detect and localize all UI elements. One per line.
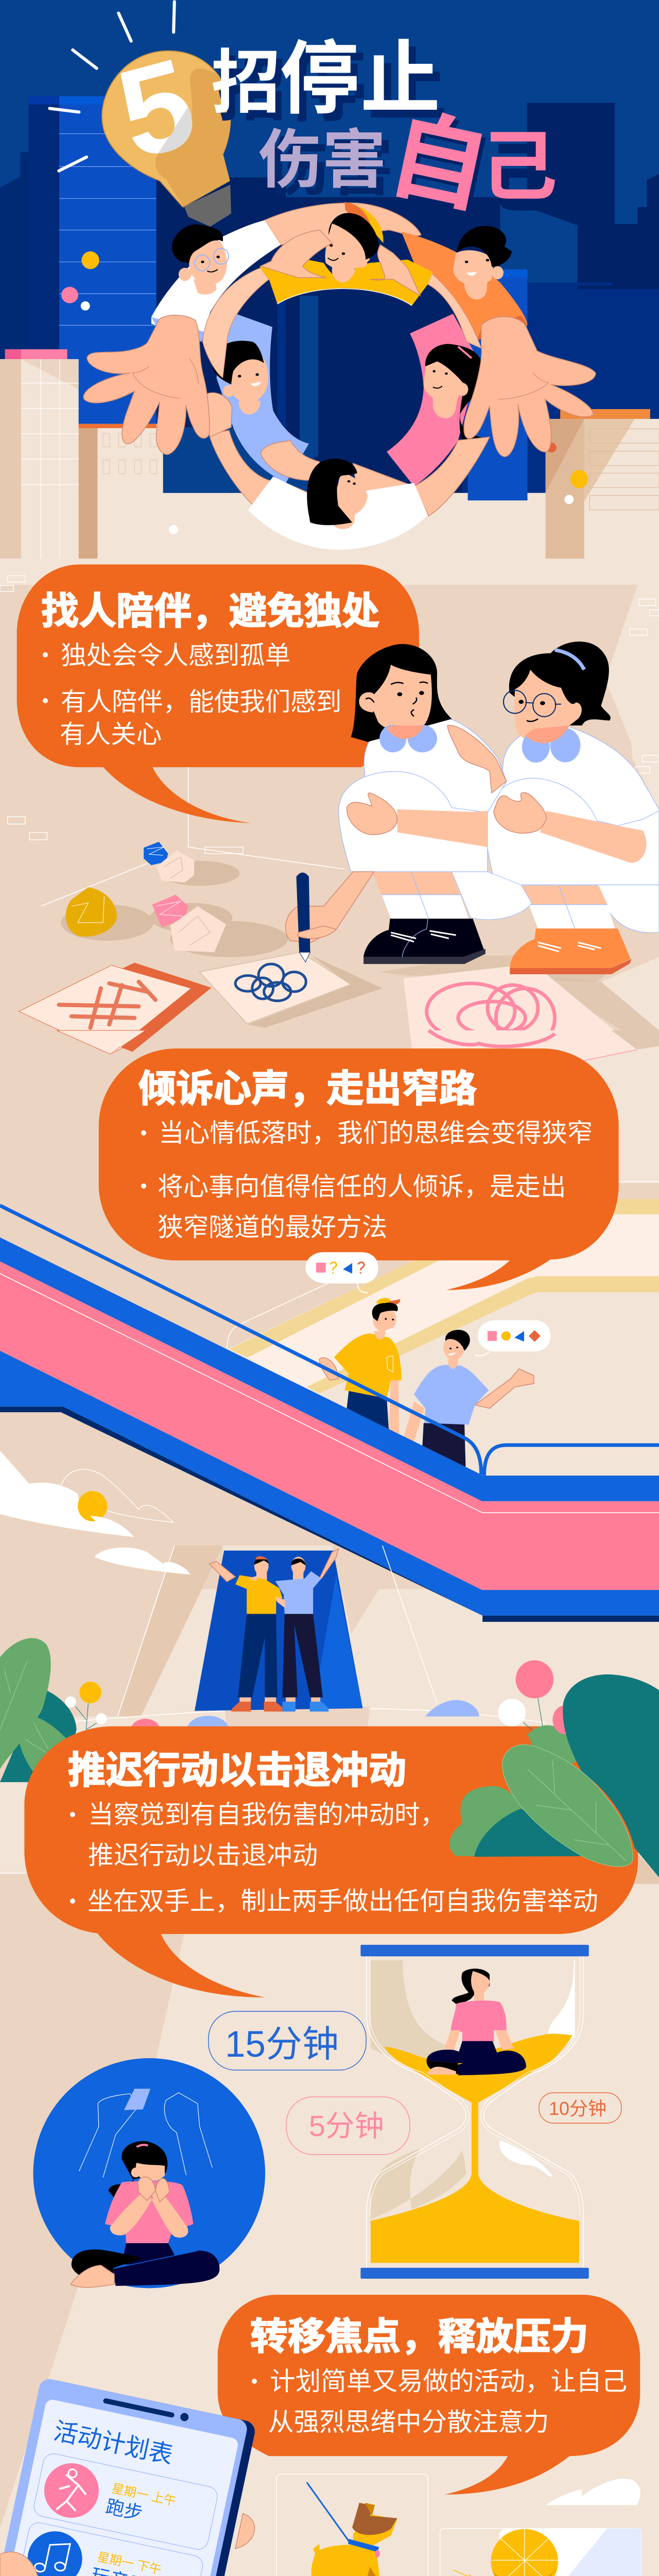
floor shadows [61,861,630,982]
title: 5招停止伤害自己: 停 [280,35,359,124]
background: room floor section 1 [0,575,659,1030]
schedule title: 活动计划表 [51,2417,176,2469]
illustration: dog, basketball frames [276,2474,641,2576]
illustration: distressed woman in blue circle [33,2058,265,2288]
illustration: two girls sitting and scribbling [19,641,659,1054]
bubble: 推迟行动以击退冲动: 推迟行动以击退冲动 [68,1750,406,1791]
title bulb with number 5: 5 [105,31,209,185]
scribbled papers [19,952,637,1054]
title bulb with number 5 [49,2,231,227]
person: pink shirt [387,314,490,486]
arms forming lower ring [202,268,490,516]
time label: 15分钟: 15分钟 [225,2024,339,2065]
hands with blade outline [79,2089,212,2177]
dome decoration [425,1700,479,1717]
card: running [32,2452,219,2551]
meditating woman in hourglass [427,1969,526,2075]
title: 5招停止伤害自己: 招 [211,44,281,122]
crumpled paper balls [66,842,226,952]
background: stage tent and ground [0,1543,659,2528]
title: 5招停止伤害自己: 止 [360,35,440,124]
title: 5招停止伤害自己: 伤害 [258,125,386,196]
title: 5招停止伤害自己: 招 [217,52,287,129]
bubble: 推迟行动以击退冲动: 推迟行动以击退冲动 [88,1841,318,1870]
phone: activity schedule [0,2377,257,2576]
man in yellow [210,1556,284,1711]
title: 5招停止伤害自己: 己 [488,135,565,222]
time label: 5分钟 [286,2097,410,2155]
card: music [18,2521,204,2576]
title: 5招停止伤害自己: 己 [480,123,558,210]
bubble: 推迟行动以击退冲动: 坐在双手上，制止两手做出任何自我伤害举动 [88,1887,598,1916]
plants right with balloons [449,1660,659,1877]
title: 5招停止伤害自己 [211,35,565,230]
card: running: 星期一 上午 [111,2482,177,2509]
bubble: 倾诉心声，走出窄路: 狭窄隧道的最好方法 [158,1213,387,1242]
ring interior [269,292,423,467]
bubble: 倾诉心声，走出窄路: 将心事向值得信任的人倾诉，是走出 [158,1172,566,1201]
background: escalator hall wall [0,1030,659,1589]
bubble: 转移焦点，释放压力: 从强烈思绪中分散注意力 [268,2408,549,2436]
escalator [0,1206,659,1622]
title: 5招停止伤害自己: 自 [384,103,501,230]
buildings: foreground left and right [0,349,659,558]
speech bubble with symbols [305,1252,378,1293]
thumb [0,2552,38,2576]
person: light-blue shirt [212,312,309,483]
bubble: 转移焦点，释放压力: 转移焦点，释放压力 [250,2316,588,2358]
woman crying [71,2141,219,2287]
time label: 5分钟: 5分钟 [309,2110,384,2143]
bubble: 找人陪伴，避免独处: 独处会令人感到孤单 [61,641,290,670]
bubble: 倾诉心声，走出窄路: 倾诉心声，走出窄路 [138,1068,477,1110]
title: 5招停止伤害自己: 停 [287,42,367,131]
girl one [286,644,532,964]
man in blue [248,1549,338,1711]
hand fingers holding the phone [0,2514,265,2576]
title: 5招停止伤害自己: 伤害 [266,132,393,204]
basketball and hoop [440,2529,641,2576]
bubble: 倾诉心声，走出窄路: 当心情低落时，我们的思维会变得狭窄 [159,1118,593,1147]
right fingers [169,2514,265,2576]
bubble: 转移焦点，释放压力: 计划简单又易做的活动，让自己 [270,2367,627,2396]
large right hand [464,317,596,456]
large left hand [83,315,210,454]
dog on a leash [276,2474,428,2576]
title: 5招停止伤害自己: 自 [380,99,498,226]
cloud and sun [0,1451,173,1537]
bubble: 找人陪伴，避免独处 [17,565,419,823]
plants left with balloons [0,1638,229,1782]
title: 5招停止伤害自己: 止 [368,42,447,131]
man in blue shirt [404,1330,534,1467]
card: running: 跑步 [104,2496,145,2524]
illustration: five friends linking arms in a ring [83,202,596,550]
time label: 15分钟 [209,2011,366,2070]
title bulb with number 5: 5 [105,31,209,185]
background: night city skyline [0,0,659,500]
cloud right [546,2479,640,2505]
glass and sand [360,1945,589,2279]
time label: 10分钟 [539,2093,621,2123]
bubble: 倾诉心声，走出窄路 [99,1048,619,1290]
bubble: 转移焦点，释放压力 [218,2295,640,2495]
person: white shirt [151,203,421,342]
girl two [485,641,659,974]
man in yellow shirt [319,1298,402,1434]
bubble: 找人陪伴，避免独处: 有人关心 [60,720,162,749]
time label: 10分钟: 10分钟 [549,2098,606,2119]
illustration: two men standing in a blue doorway [0,1548,479,1782]
bubble: 推迟行动以击退冲动: 当察觉到有自我伤害的冲动时， [88,1800,445,1829]
person: lady at bottom centre [248,459,428,550]
bubble: 找人陪伴，避免独处: 找人陪伴，避免独处 [41,590,379,632]
hourglass [360,1945,589,2279]
blue doorway [95,1548,362,1711]
illustration: two men on escalator [0,1206,659,1622]
person: yellow shirt and cap at top [259,202,433,306]
speech bubble with shapes [475,1320,550,1355]
person: orange shirt [402,226,527,340]
bubble: 找人陪伴，避免独处: 有人陪伴，能使我们感到 [61,687,342,716]
bubble: 推迟行动以击退冲动 [24,1726,638,1997]
